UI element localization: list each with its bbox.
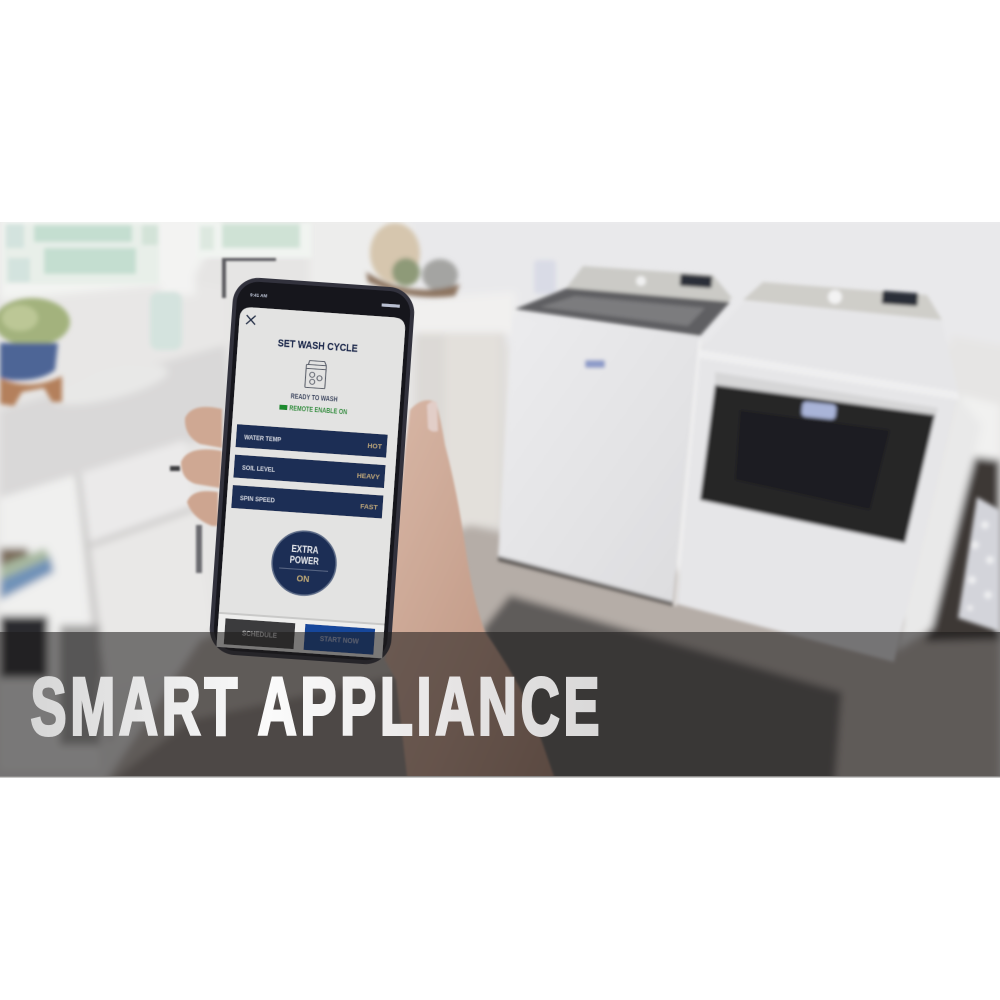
shelf decor behind sink bbox=[366, 223, 556, 297]
setting bar: soil level bbox=[233, 455, 386, 488]
washer bbox=[498, 266, 732, 606]
laundry basket bbox=[958, 497, 1000, 632]
right counter and cabinet bbox=[950, 335, 1000, 405]
plant and pot bbox=[0, 292, 182, 406]
bookshelf objects bbox=[0, 548, 28, 570]
hand bbox=[181, 400, 557, 785]
fingers bbox=[185, 407, 222, 448]
schedule button bbox=[224, 618, 295, 649]
close icon bbox=[246, 315, 256, 325]
phone body bbox=[208, 276, 416, 666]
dark caption band bbox=[0, 632, 1000, 778]
setting bar: spin speed bbox=[231, 485, 383, 518]
washer icon bbox=[305, 360, 327, 389]
extra power button: EXTRA bbox=[291, 544, 319, 557]
bottom edge of photo bbox=[0, 776, 1000, 778]
dryer bbox=[675, 282, 960, 662]
status text: READY TO WASH bbox=[290, 393, 338, 404]
left counter bbox=[0, 345, 235, 498]
setting bar: soil level: SOIL LEVEL bbox=[242, 465, 275, 474]
setting bar: water temp bbox=[235, 424, 388, 458]
remote enable: REMOTE ENABLE ON bbox=[289, 405, 347, 416]
setting bar: water temp: HOT bbox=[367, 443, 383, 451]
setting bar: spin speed: SPIN SPEED bbox=[240, 495, 275, 504]
status bar: 9:41 AM bbox=[250, 292, 268, 298]
start now button: START NOW bbox=[320, 634, 360, 646]
room background bbox=[0, 215, 1000, 790]
windows bbox=[4, 222, 312, 284]
screen title: SET WASH CYCLE bbox=[277, 337, 358, 355]
setting bar: water temp: WATER TEMP bbox=[244, 434, 282, 444]
setting bar: soil level: HEAVY bbox=[357, 473, 380, 481]
back counter bbox=[405, 292, 515, 335]
start now button bbox=[304, 624, 375, 655]
bottom action area bbox=[217, 614, 384, 658]
smartphone bbox=[208, 276, 416, 666]
title: SMART APPLIANCE bbox=[30, 660, 599, 752]
extra power button: POWER bbox=[289, 555, 320, 568]
rug bbox=[482, 595, 842, 785]
thumb nail bbox=[427, 401, 438, 432]
setting bar: spin speed: FAST bbox=[360, 503, 379, 512]
screen bbox=[218, 307, 406, 624]
thumb and wrist bbox=[385, 400, 557, 785]
remote enable bbox=[279, 404, 348, 414]
photo: blurred laundry room bbox=[0, 215, 1000, 790]
extra power button bbox=[270, 529, 338, 597]
schedule button: SCHEDULE bbox=[242, 629, 277, 640]
left cabinets bbox=[2, 477, 86, 632]
extra power button: ON bbox=[296, 573, 310, 584]
faucet bbox=[170, 258, 276, 573]
floor bbox=[100, 525, 1000, 790]
